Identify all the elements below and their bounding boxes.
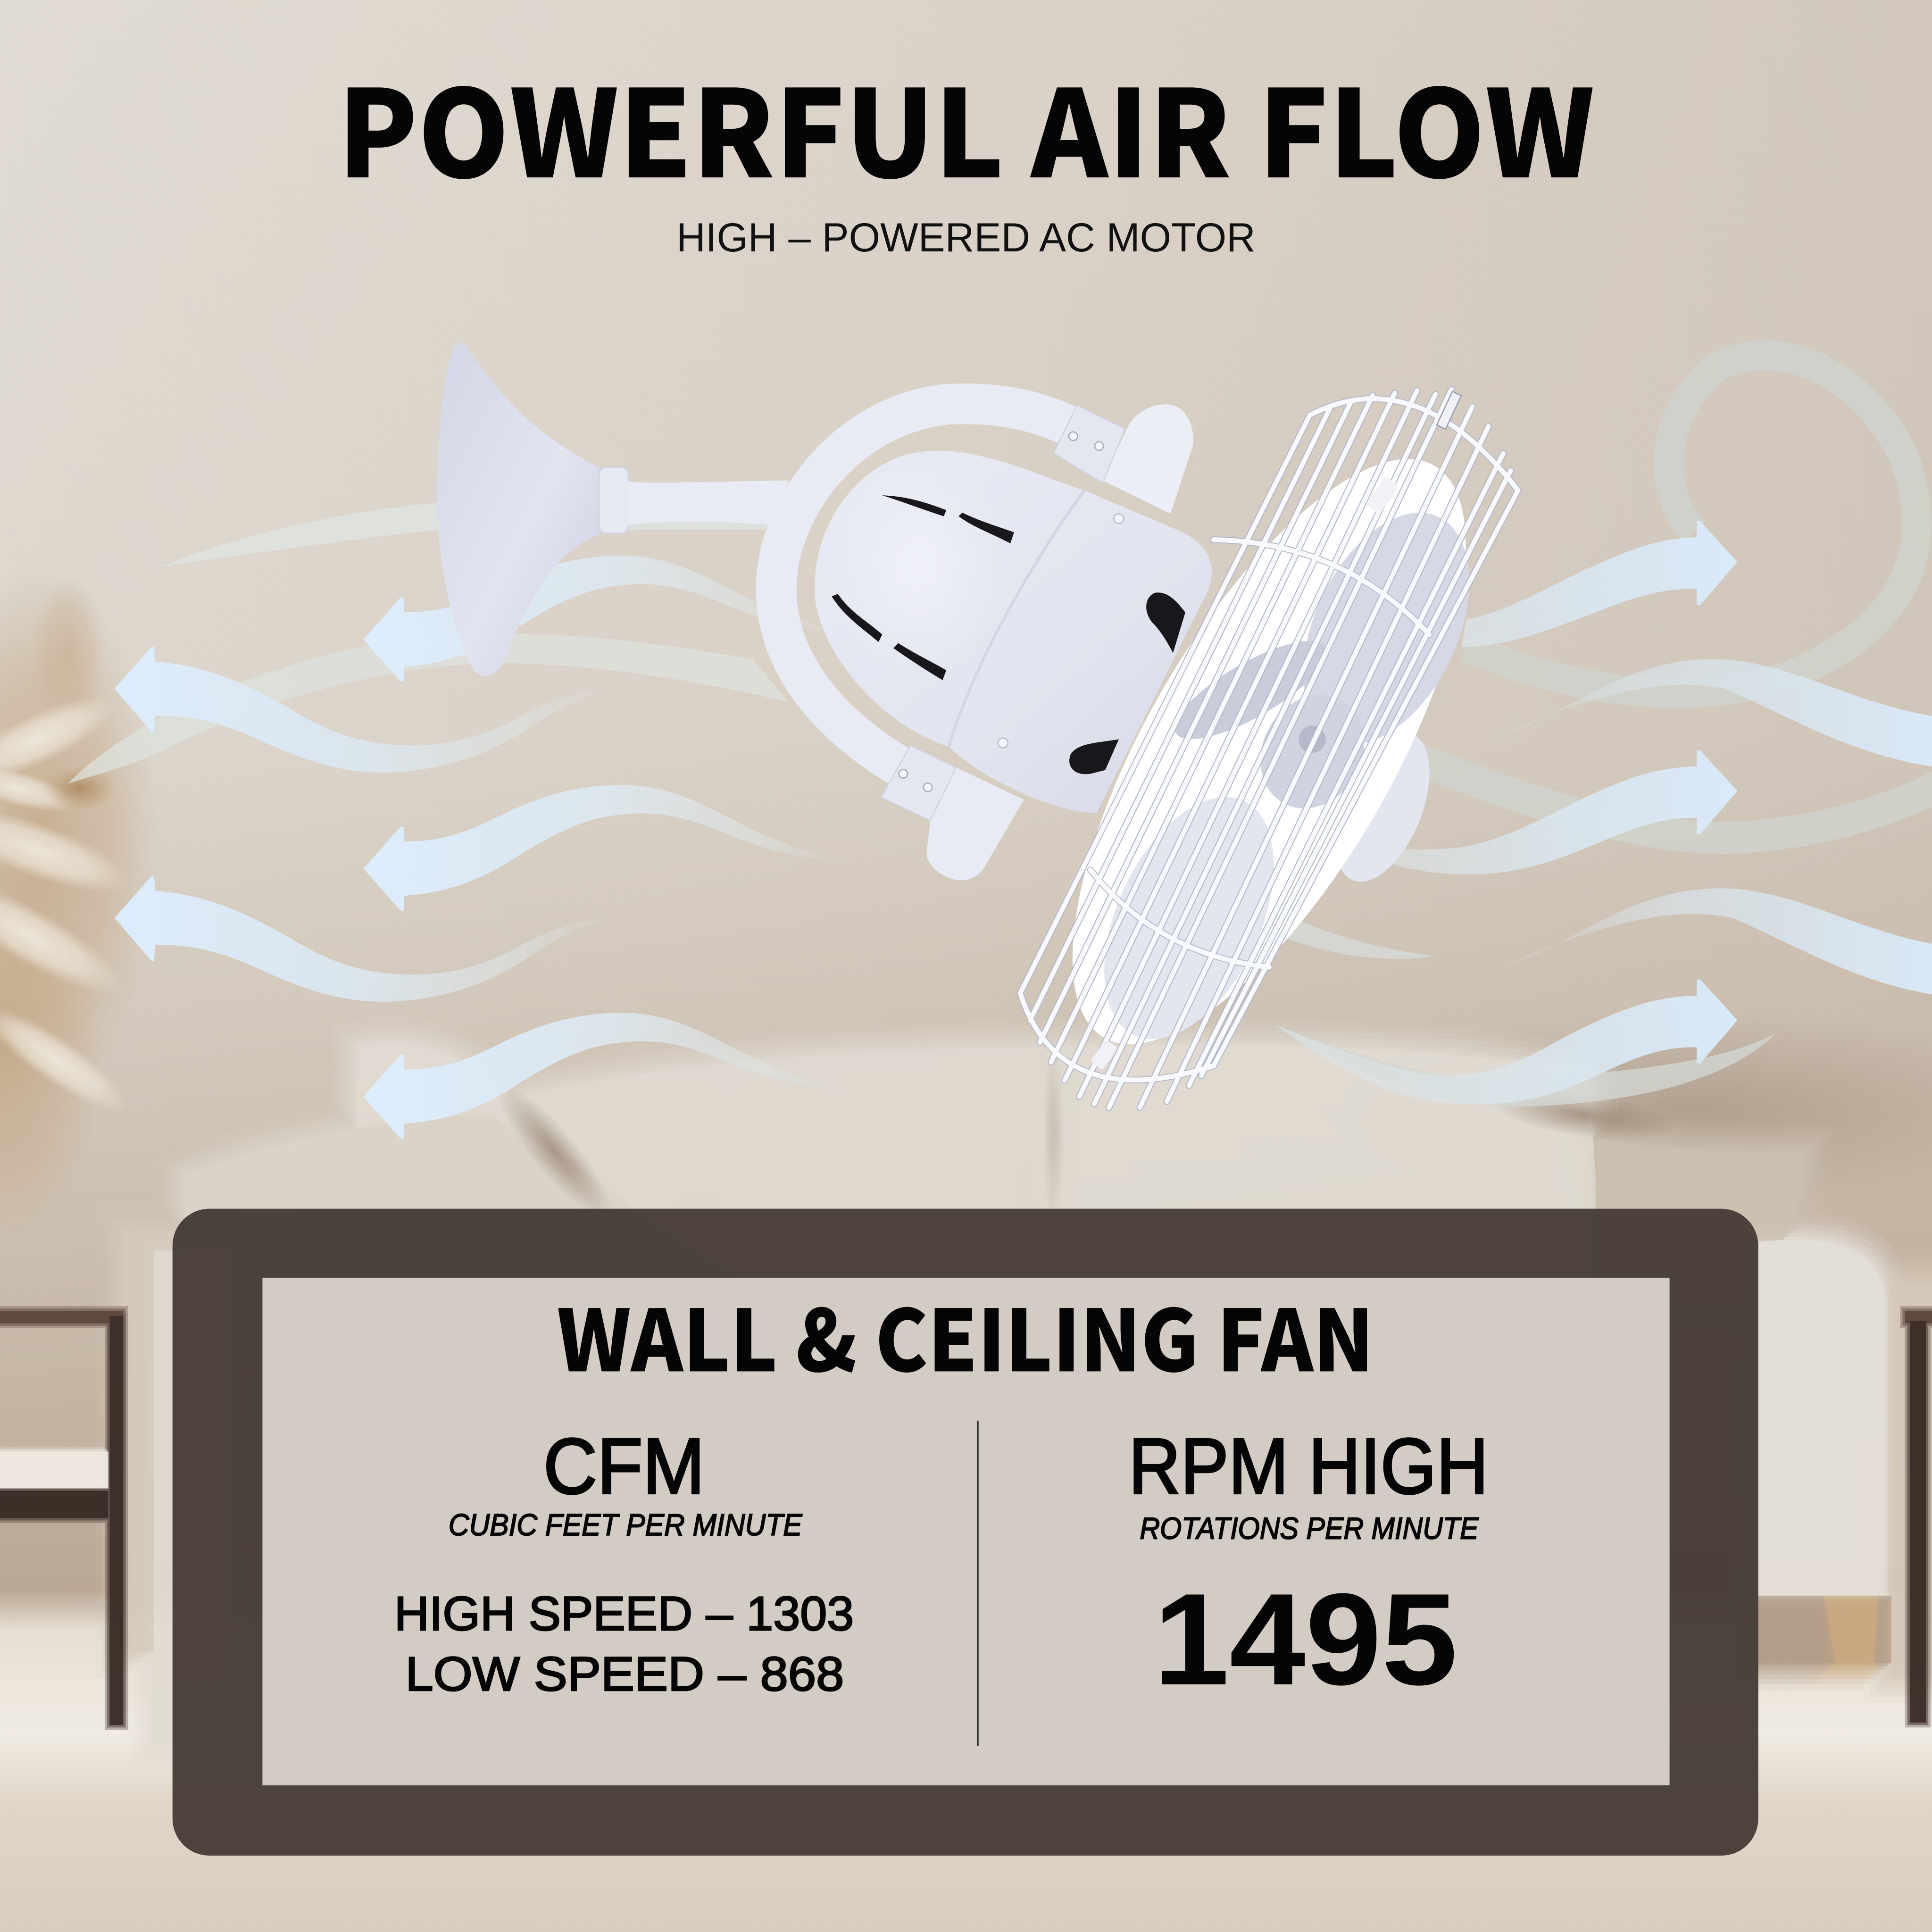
arrow: near bell <box>364 556 850 682</box>
CFM column: CFM <box>543 1423 705 1510</box>
fan: cage wires <box>1020 389 1518 1108</box>
fan: screws <box>998 514 1124 748</box>
arrow: right middle <box>1386 750 1737 874</box>
panel outer frame <box>173 1209 1758 1856</box>
arrow: middle <box>364 785 850 910</box>
arrow: bottom <box>364 1013 850 1139</box>
airflow background ribbons <box>68 355 1932 1107</box>
fan: vent slots <box>832 495 1185 774</box>
CFM column <box>394 1423 854 1701</box>
fan: blades <box>997 404 1541 1099</box>
wave: lower right edge <box>1496 888 1932 996</box>
RPM column: RPM HIGH <box>1129 1423 1489 1510</box>
CFM column: LOW SPEED – 868 <box>405 1647 844 1701</box>
CFM column: CUBIC FEET PER MINUTE <box>449 1507 803 1542</box>
fan: upper bracket <box>1053 404 1193 514</box>
fan: rear motor cover <box>1316 719 1449 895</box>
panel inner card <box>262 1278 1670 1785</box>
panel heading: WALL & CEILING FAN <box>557 1273 1374 1396</box>
arrows blowing right <box>1275 521 1932 1104</box>
fan: arm pipe <box>626 481 789 525</box>
fan: motor housing <box>815 451 1212 813</box>
fan: wall mount bell <box>437 342 604 676</box>
arrows blowing left <box>115 556 850 1139</box>
arrow: left upper long <box>115 647 614 773</box>
RPM column: ROTATIONS PER MINUTE <box>1140 1511 1479 1546</box>
column divider <box>977 1421 979 1746</box>
CFM column: HIGH SPEED – 1303 <box>394 1587 854 1641</box>
wave: upper right edge <box>1489 659 1932 766</box>
fan: lower bracket <box>881 745 1024 880</box>
arrow: right top <box>1461 521 1737 647</box>
cushion shadows <box>482 1041 1678 1232</box>
icon: wall-mounted fan <box>437 342 1541 1108</box>
plant <box>0 567 160 1244</box>
panel: specifications <box>173 1209 1758 1856</box>
arrow: right bottom <box>1275 980 1737 1104</box>
fan: yoke <box>776 404 1091 770</box>
title: POWERFUL AIR FLOW <box>338 37 1594 212</box>
RPM column <box>1129 1423 1489 1712</box>
RPM column: 1495 <box>1153 1566 1457 1712</box>
fan: bell collar <box>599 467 628 533</box>
arrow: left lower long <box>115 876 614 1002</box>
subtitle: HIGH – POWERED AC MOTOR <box>676 215 1256 260</box>
